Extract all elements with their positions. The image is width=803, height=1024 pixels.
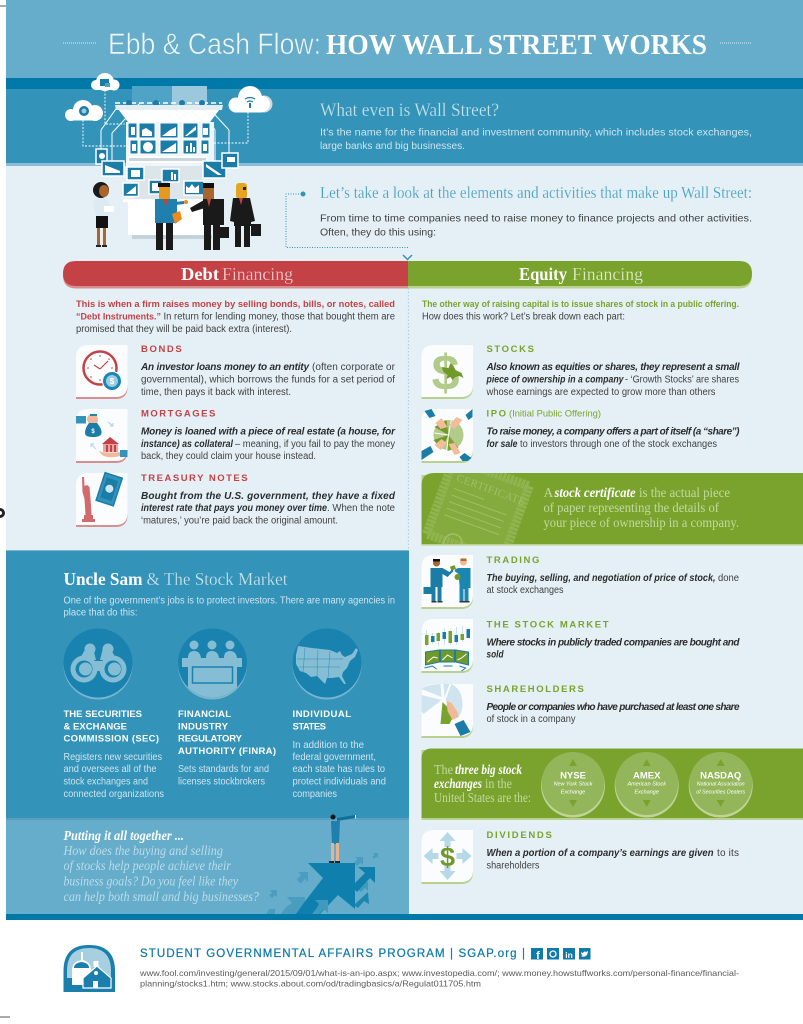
icon: woman with telescope on rising arrows [266, 814, 378, 915]
item: stocks [422, 344, 740, 401]
callout: stock certificate: stock certificate [554, 485, 636, 500]
banner: debt financing: Debt [181, 264, 219, 284]
item: bonds: (often corporate or [312, 362, 396, 373]
banner: debt financing [63, 261, 408, 288]
text block: debt financing intro: “Debt Instruments.” [76, 312, 161, 322]
item: treasury notes: TREASURY NOTES [141, 473, 249, 484]
panel: three big stock exchanges: The [434, 762, 453, 777]
intro panel: what even is Wall Street [6, 78, 803, 166]
item: the stock market: Where stocks in publicly traded companies are bought and [486, 638, 740, 648]
item: treasury notes: interest rate that pays you money over time [141, 503, 327, 514]
column: individual states: INDIVIDUAL [292, 709, 351, 720]
item: mortgages [76, 408, 396, 463]
item: mortgages: Money is loaned with a piece of real estate (a house, for [141, 426, 396, 438]
column: SEC: and oversees all of the [64, 764, 157, 775]
column: SEC: connected organizations [64, 789, 164, 800]
item: bonds [76, 344, 396, 399]
social icons: in [565, 950, 573, 960]
text block: equity financing intro: How does this work? Let’s break down each part: [422, 312, 625, 322]
heading: Uncle Sam: Uncle Sam [64, 569, 142, 589]
callout: stock certificate: your piece of ownership in a company. [544, 515, 739, 530]
header band with title: Ebb & Cash Flow: [108, 28, 321, 61]
banner: equity financing: Financing [572, 264, 643, 284]
item: the stock market: sold [486, 650, 504, 660]
item: treasury notes: Bought from the U.S. government, they have a fixed [141, 491, 396, 502]
header band with title [6, 0, 803, 78]
column: individual states: protect individuals and [292, 776, 386, 788]
column: FINRA [178, 709, 276, 788]
intro panel: what even is Wall Street: What even is Wall Street? [320, 100, 499, 121]
column: FINRA: REGULATORY [178, 734, 243, 744]
column: SEC: & EXCHANGE [64, 722, 127, 732]
text block: equity financing intro [422, 299, 739, 322]
panel: putting it all together: How does the buying and selling [63, 843, 223, 858]
item: mortgages: back, they could claim your house instead. [141, 451, 316, 462]
callout: stock certificate: is the actual piece [639, 485, 730, 500]
icon: stock certificate: CERTIFICATE [455, 472, 527, 508]
item: shareholders: SHAREHOLDERS [486, 684, 585, 695]
exchange: NASDAQ [689, 752, 753, 818]
icon: stock certificate [422, 473, 534, 544]
item: bonds: BONDS [141, 344, 183, 355]
exchange: AMEX: AMEX [633, 770, 661, 782]
item: the stock market: THE STOCK MARKET [486, 620, 610, 630]
item: stocks: $ [432, 345, 460, 401]
footer sources: planning/stocks1.htm; www.stocks.about.com/od/tradingbasics/a/Regulat011705.htm [140, 978, 481, 988]
column: FINRA: AUTHORITY (FINRA) [178, 746, 276, 757]
callout: stock certificate: of paper representing the details of [544, 500, 719, 515]
item: trading: TRADING [486, 555, 541, 566]
panel: putting it all together: business goals? Do you feel like they [64, 874, 238, 888]
column: individual states: federal government, [292, 752, 376, 763]
item: trading: The buying, selling, and negotiation of price of stock, [486, 573, 716, 584]
item: dividends: $ [440, 842, 455, 872]
item: stocks: Also known as equities or shares, they represent a small [486, 362, 740, 373]
icon: binoculars [64, 628, 132, 700]
footer sources [139, 968, 739, 988]
panel: three big stock exchanges: exchanges [434, 776, 482, 791]
dotted arrow connector [286, 194, 412, 260]
banner: equity financing [408, 261, 752, 288]
item: bonds: governmental), which borrows the funds for a set period of [141, 374, 395, 386]
panel: putting it all together: of stocks help people achieve their [64, 858, 232, 873]
item: stocks: - ‘Growth Stocks’ are shares [625, 374, 739, 386]
text block: intro to agencies: One of the government’s jobs is to protect investors. There are many agencies in [64, 596, 395, 606]
item: trading: done [718, 573, 739, 584]
callout: stock certificate: A [544, 485, 554, 500]
item: IPO: (Initial Public Offering) [509, 408, 601, 420]
text block: debt financing intro: promised that they will be paid back extra (interest). [76, 324, 292, 335]
exchange: AMEX: Exchange [634, 790, 659, 796]
panel: putting it all together: can help both small and big businesses? [64, 889, 259, 904]
item: shareholders: of stock in a company [486, 714, 576, 725]
item: treasury notes: ‘matures,’ you’re paid back the original amount. [141, 516, 338, 526]
header band with title: HOW WALL STREET WORKS [326, 29, 707, 61]
column: SEC [64, 709, 164, 800]
text block: intro to agencies: place that do this: [64, 608, 138, 618]
item: dividends: shareholders [486, 860, 540, 872]
column: FINRA: Sets standards for and [178, 764, 269, 775]
icon: map of the United States [292, 628, 362, 700]
item: dividends [422, 830, 739, 884]
item: bonds: $ [110, 377, 115, 386]
column: FINRA: licenses stockbrokers [178, 776, 265, 788]
item: stocks: piece of ownership in a company [486, 374, 624, 386]
logo: SGAP capitol and schoolhouse [64, 945, 115, 992]
heading: let's take a look [300, 183, 752, 238]
banner: debt financing: Financing [222, 264, 293, 284]
item: mortgages: instance) as collateral [141, 439, 233, 450]
panel: Uncle Sam and the stock market [6, 550, 409, 820]
item: dividends: DIVIDENDS [486, 830, 554, 841]
illustration: Wall Street trading floor with business people [65, 73, 272, 250]
item: IPO: for sale [486, 439, 518, 450]
text block: debt financing intro [76, 299, 395, 335]
column: individual states [292, 709, 386, 800]
item: IPO: To raise money, a company offers a part of itself (a “share”) [486, 426, 740, 438]
text block: equity financing intro: The other way of raising capital is to issue shares of stock in a public offering. [422, 299, 739, 310]
heading: let's take a look: Let’s take a look at the elements and activities that make up Wall Street: [320, 183, 752, 202]
item: mortgages: – meaning, if you fail to pay the money [235, 439, 395, 450]
footer heading: STUDENT GOVERNMENTAL AFFAIRS PROGRAM | SGAP.org | [140, 948, 525, 960]
exchange: NYSE: New York Stock [554, 782, 593, 788]
item: bonds: time, then pays it back with interest. [141, 387, 291, 398]
item: stocks: STOCKS [486, 344, 536, 355]
item: trading: at stock exchanges [486, 585, 564, 596]
text block: intro to agencies [64, 596, 395, 618]
exchange: NYSE: NYSE [560, 770, 586, 782]
item: treasury notes [76, 473, 396, 527]
intro panel: what even is Wall Street: It’s the name for the financial and investment community, which includes stock exchanges, [320, 128, 752, 138]
item: mortgages: $ [91, 429, 95, 435]
heading: let's take a look: From time to time companies need to raise money to finance projects and other activities. [320, 214, 752, 224]
column: individual states: companies [292, 789, 337, 800]
item: bonds: An investor loans money to an entity [140, 362, 309, 373]
heading: Uncle Sam: & The Stock Market [146, 569, 288, 589]
footer sources: www.fool.com/investing/general/2015/09/01/what-is-an-ipo.aspx; www.investopedia.com/; www.money.howstuffworks.com/personal-finance/financial- [139, 968, 739, 978]
item: dividends: to its [717, 848, 739, 859]
item: mortgages: MORTGAGES [141, 408, 217, 420]
item: IPO: IPO [486, 408, 508, 420]
item: stocks: whose earnings are expected to grow more than others [486, 387, 716, 398]
exchange: NASDAQ: of Securities Dealers [696, 790, 745, 796]
panel: three big stock exchanges: three big stock [455, 762, 522, 777]
column: individual states: STATES [292, 722, 326, 732]
social icons: f [536, 950, 540, 962]
item: dividends: When a portion of a company’s earnings are given [486, 848, 714, 859]
text block: debt financing intro: This is when a firm raises money by selling bonds, bills, or notes, called [76, 299, 395, 310]
column: SEC: COMMISSION (SEC) [64, 734, 159, 744]
exchange: NYSE [541, 752, 605, 818]
callout: stock certificate [422, 473, 803, 546]
heading: let's take a look: Often, they do this using: [320, 228, 436, 238]
item: shareholders: People or companies who have purchased at least one share [486, 702, 740, 713]
column: FINRA: FINANCIAL [178, 709, 231, 720]
exchange: NASDAQ: National Association [697, 782, 745, 788]
item: trading [422, 555, 739, 609]
column: individual states: In addition to the [292, 740, 364, 751]
item: the stock market [422, 619, 740, 673]
panel: three big stock exchanges: United States are the: [434, 790, 531, 805]
column: FINRA: INDUSTRY [178, 722, 229, 732]
item: IPO: to investors through one of the stock exchanges [520, 439, 717, 450]
exchange: AMEX [615, 752, 679, 818]
item: treasury notes: . When the note [327, 503, 395, 514]
column: individual states: each state has rules to [292, 764, 385, 775]
column: SEC: Registers new securities [64, 752, 162, 763]
exchange: NYSE: Exchange [561, 790, 585, 796]
item: IPO [422, 408, 740, 463]
text block: debt financing intro: In return for lending money, those that bought them are [164, 312, 395, 322]
social icons [531, 948, 590, 962]
column: SEC: THE SECURITIES [64, 709, 142, 720]
icon: regulators at a panel desk [178, 628, 247, 700]
panel: putting it all together: Putting it all together ... [64, 828, 184, 843]
item: shareholders [422, 684, 740, 738]
heading: Uncle Sam [64, 569, 288, 589]
exchange: AMEX: American Stock [626, 782, 666, 788]
panel: putting it all together [6, 814, 409, 915]
banner: equity financing: Equity [519, 264, 567, 284]
panel: three big stock exchanges [422, 748, 803, 820]
column: SEC: stock exchanges and [64, 776, 148, 788]
intro panel: what even is Wall Street: large banks and big businesses. [320, 141, 465, 152]
panel: three big stock exchanges: in the [485, 776, 512, 791]
exchange: NASDAQ: NASDAQ [700, 770, 741, 782]
